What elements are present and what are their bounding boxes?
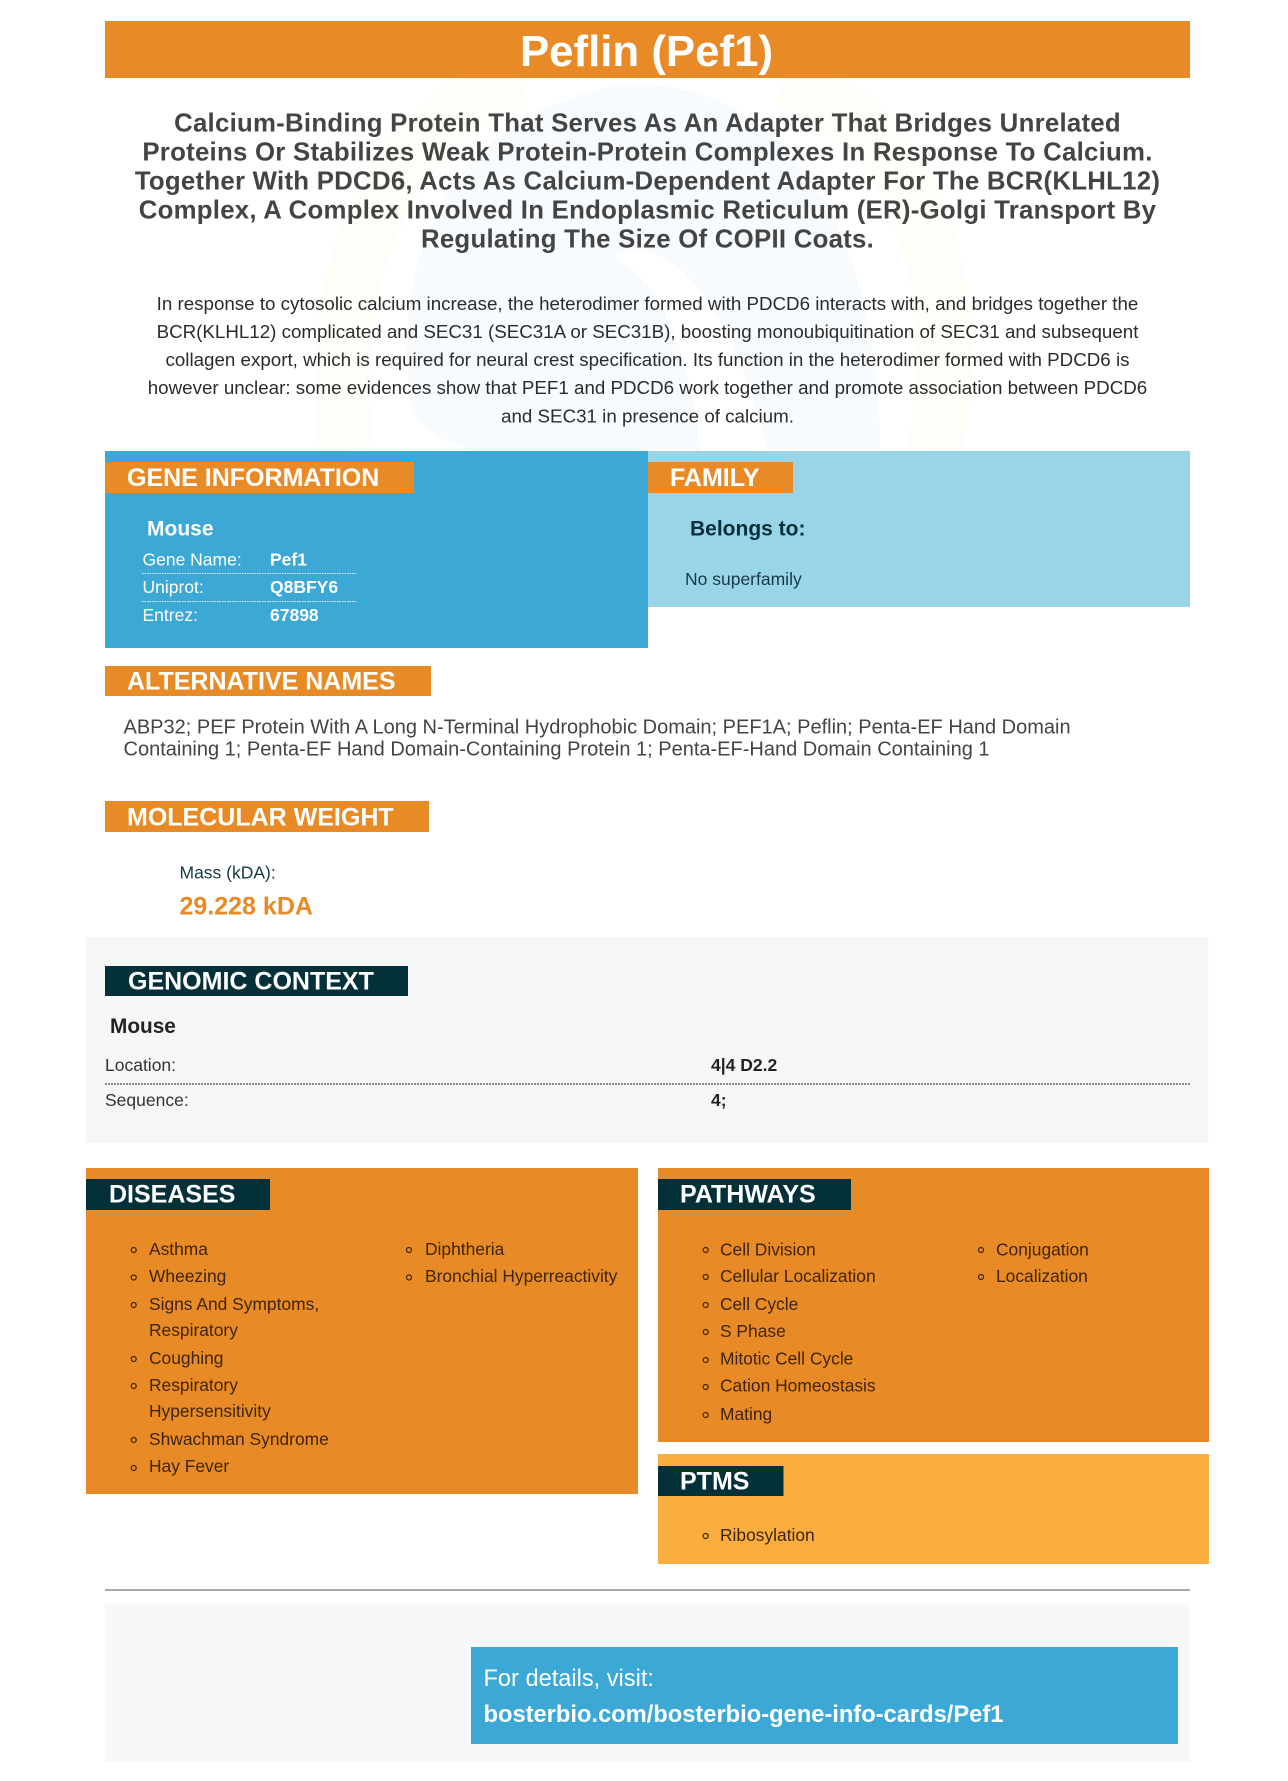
species: mouse: Mouse xyxy=(110,1015,176,1038)
pathways list: Cell Division xyxy=(720,1240,816,1260)
heading: family xyxy=(648,462,793,493)
pathways list: Mating xyxy=(720,1404,772,1424)
diseases list: Respiratory xyxy=(149,1320,238,1340)
title banner: Peflin (Pef1) xyxy=(520,27,773,76)
call to action box xyxy=(471,1647,1178,1744)
subtitle heading: Complex, A Complex Involved In Endoplasmic Reticulum (ER)-Golgi Transport By xyxy=(139,196,1157,224)
panel: ptms xyxy=(658,1454,1209,1564)
location row: Location: xyxy=(105,1055,176,1075)
diseases list: Wheezing xyxy=(149,1266,226,1286)
alternative names text xyxy=(124,716,1071,760)
heading: ptms: PTMS xyxy=(680,1468,749,1496)
pathways list: Cell Cycle xyxy=(720,1294,798,1314)
pathways list: Localization xyxy=(996,1266,1088,1286)
diseases list: Respiratory xyxy=(149,1375,238,1395)
heading: pathways xyxy=(658,1179,851,1210)
description paragraph xyxy=(148,293,1147,426)
gene details table: Q8BFY6 xyxy=(270,577,338,597)
mass value: 29.228 kDA xyxy=(180,892,313,920)
heading: genomic context: GENOMIC CONTEXT xyxy=(128,968,374,996)
diseases list: Signs And Symptoms, xyxy=(149,1294,319,1314)
heading: molecular weight: MOLECULAR WEIGHT xyxy=(127,804,394,832)
subtitle heading: Proteins Or Stabilizes Weak Protein-Protein Complexes In Response To Calcium. xyxy=(142,138,1153,166)
alternative names text: ABP32; PEF Protein With A Long N-Terminal Hydrophobic Domain; PEF1A; Peflin; Penta-EF Hand Domain xyxy=(124,716,1071,738)
ptms list: Ribosylation xyxy=(720,1525,815,1545)
mass value xyxy=(180,862,313,920)
gene details table: Pef1 xyxy=(270,550,307,570)
gene details table: Gene Name: xyxy=(142,550,242,570)
gene details table xyxy=(142,550,357,625)
belongs to: Belongs to: xyxy=(690,518,806,540)
panel: family xyxy=(648,451,1190,607)
diseases list: Coughing xyxy=(149,1348,223,1368)
heading: ptms xyxy=(658,1466,784,1496)
subtitle heading: Regulating The Size Of COPII Coats. xyxy=(421,226,874,254)
heading: alternative names: ALTERNATIVE NAMES xyxy=(127,668,396,696)
footer panel xyxy=(105,1604,1190,1762)
pathways list xyxy=(703,1240,1089,1424)
diseases list xyxy=(131,1239,618,1476)
call to action box: bosterbio.com/bosterbio-gene-info-cards/Pef1 xyxy=(484,1702,1003,1728)
description paragraph: and SEC31 in presence of calcium. xyxy=(501,406,794,426)
no superfamily: No superfamily xyxy=(685,569,802,589)
gene details table: Entrez: xyxy=(142,605,198,625)
heading: pathways: PATHWAYS xyxy=(680,1180,816,1208)
subtitle heading: Together With PDCD6, Acts As Calcium-Dependent Adapter For The BCR(KLHL12) xyxy=(135,168,1160,196)
panel: pathways xyxy=(658,1168,1209,1442)
sequence row: Sequence: xyxy=(105,1090,189,1110)
heading: family: FAMILY xyxy=(670,464,760,492)
pathways list: Conjugation xyxy=(996,1240,1089,1260)
description paragraph: however unclear: some evidences show that PEF1 and PDCD6 work together and promote association between PDCD6 xyxy=(148,377,1147,398)
panel: genomic context xyxy=(86,937,1208,1142)
diseases list: Diphtheria xyxy=(425,1239,505,1259)
location row: 4|4 D2.2 xyxy=(711,1055,777,1075)
heading: gene information: GENE INFORMATION xyxy=(127,464,379,492)
gene details table: Uniprot: xyxy=(142,577,204,597)
heading: diseases xyxy=(86,1179,270,1210)
sequence row: 4; xyxy=(711,1090,727,1110)
diseases list: Hay Fever xyxy=(149,1456,229,1476)
pathways list: Mitotic Cell Cycle xyxy=(720,1348,853,1368)
call to action box: For details, visit: xyxy=(484,1666,654,1692)
species: mouse: Mouse xyxy=(147,518,214,540)
location row xyxy=(105,1055,777,1075)
gene details table: 67898 xyxy=(270,605,319,625)
panel: diseases xyxy=(86,1168,638,1494)
description paragraph: collagen export, which is required for neural crest specification. Its function in the heterodimer formed with PDCD6 is xyxy=(166,349,1130,370)
pathways list: S Phase xyxy=(720,1321,786,1341)
title banner xyxy=(105,21,1190,78)
diseases list: Bronchial Hyperreactivity xyxy=(425,1266,618,1286)
description paragraph: In response to cytosolic calcium increase, the heterodimer formed with PDCD6 interacts with, and bridges together the xyxy=(157,293,1138,314)
panel: gene information xyxy=(105,451,648,648)
heading: diseases: DISEASES xyxy=(109,1180,235,1208)
diseases list: Asthma xyxy=(149,1239,208,1259)
alternative names text: Containing 1; Penta-EF Hand Domain-Containing Protein 1; Penta-EF-Hand Domain Containing 1 xyxy=(124,738,990,760)
subtitle heading: Calcium-Binding Protein That Serves As An Adapter That Bridges Unrelated xyxy=(174,110,1121,138)
description paragraph: BCR(KLHL12) complicated and SEC31 (SEC31A or SEC31B), boosting monoubiquitination of SEC31 and subsequent xyxy=(157,321,1139,342)
sequence row xyxy=(105,1090,727,1110)
pathways list: Cation Homeostasis xyxy=(720,1376,876,1396)
diseases list: Hypersensitivity xyxy=(149,1401,271,1421)
subtitle heading xyxy=(135,110,1160,254)
pathways list: Cellular Localization xyxy=(720,1266,876,1286)
watermark logo xyxy=(342,78,943,451)
diseases list: Shwachman Syndrome xyxy=(149,1429,329,1449)
mass value: Mass (kDA): xyxy=(180,862,276,882)
